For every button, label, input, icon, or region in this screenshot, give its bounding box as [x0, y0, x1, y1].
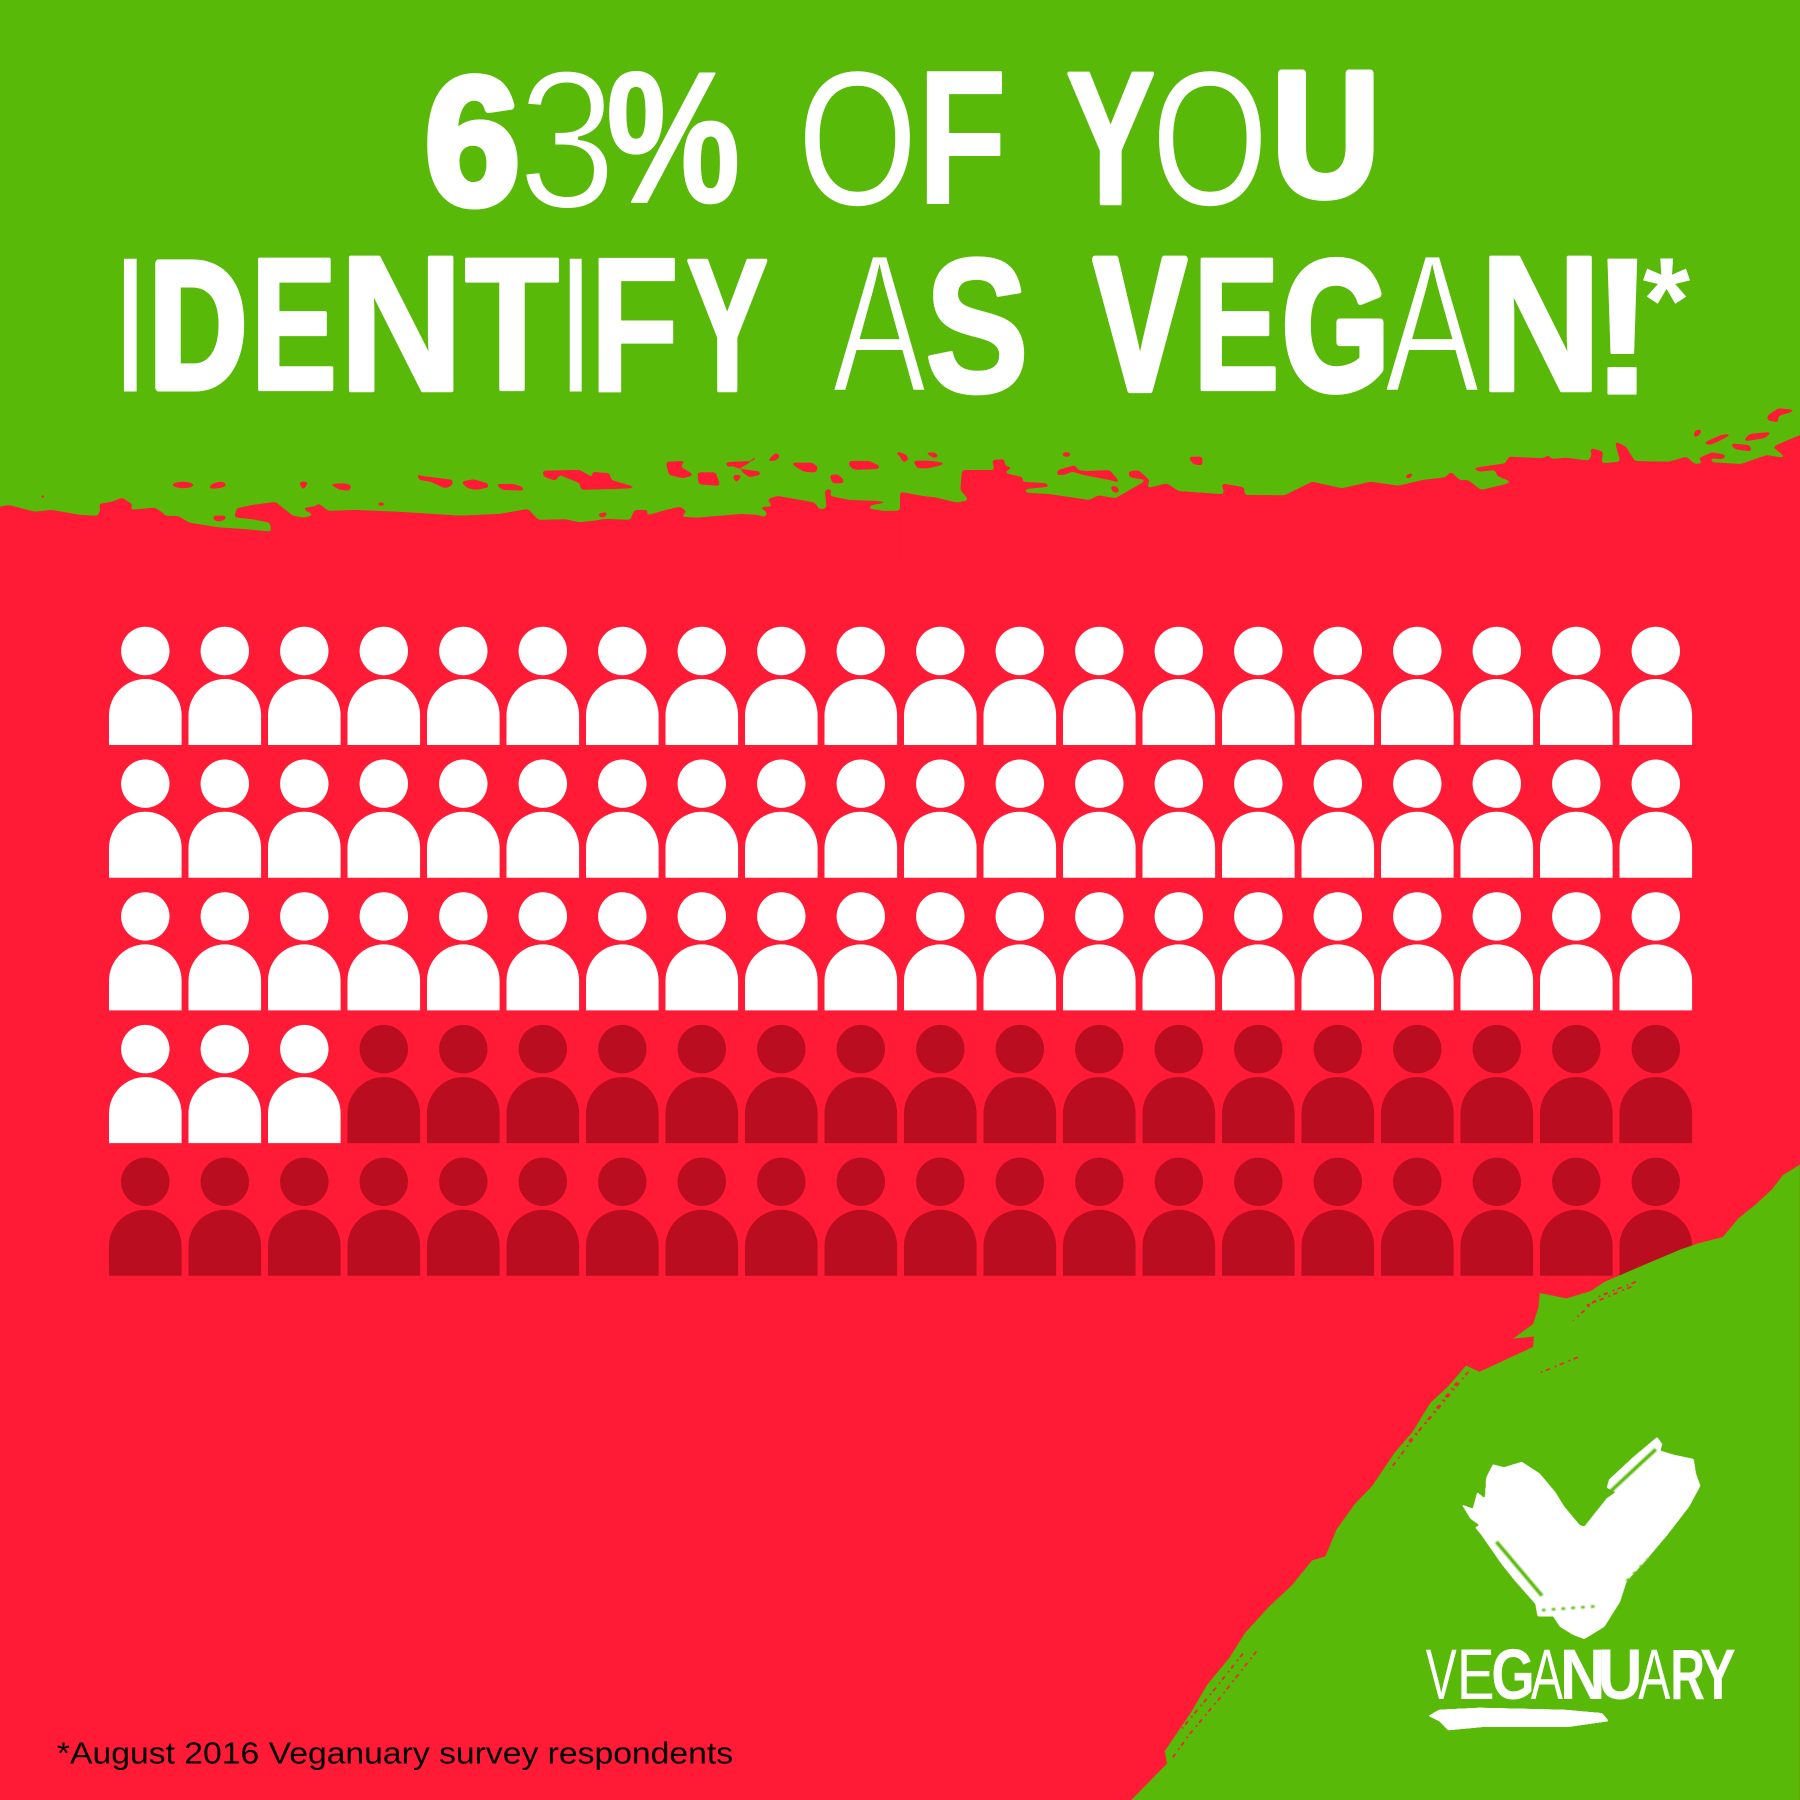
wordmark: VEGANUARY: Y — [1700, 1636, 1736, 1715]
icon: brushed white heart — [1462, 1437, 1700, 1639]
title line 2: IDENTIFY AS VEGAN!*: G — [1282, 223, 1389, 428]
title line 2: IDENTIFY AS VEGAN!*: I — [111, 216, 149, 432]
footnote: *August 2016 Veganuary survey respondents — [57, 1738, 733, 1771]
row 3: 20 white people — [109, 892, 1692, 1010]
title line 2: IDENTIFY AS VEGAN!*: D — [149, 225, 247, 426]
row 4: 3 white people, 17 dark people — [109, 1025, 1692, 1143]
title line 1: 63% OF YOU: O — [1152, 32, 1268, 245]
title line 1: 63% OF YOU: Y — [1066, 33, 1155, 243]
title line 1: 63% OF YOU: 3 — [518, 29, 616, 250]
panel: green corner with brushed edge — [1131, 1165, 1800, 1800]
title line 2: IDENTIFY AS VEGAN!*: ! — [1590, 218, 1655, 436]
title line 2: IDENTIFY AS VEGAN!*: I — [558, 216, 593, 432]
wordmark: VEGANUARY: A — [1531, 1636, 1563, 1715]
wordmark: VEGANUARY: E — [1457, 1636, 1495, 1715]
title line 2: IDENTIFY AS VEGAN!*: V — [1094, 219, 1186, 429]
title line 1: 63% OF YOU: F — [918, 31, 1007, 244]
title — [111, 29, 1691, 436]
title line 2: IDENTIFY AS VEGAN!* — [111, 212, 1691, 436]
people pictogram: 63 of 100 highlighted — [109, 627, 1692, 1276]
title line 2: IDENTIFY AS VEGAN!*: N — [339, 215, 463, 431]
title line 2: IDENTIFY AS VEGAN!*: T — [465, 219, 559, 429]
title line 2: IDENTIFY AS VEGAN!*: N — [1480, 215, 1601, 431]
title line 2: IDENTIFY AS VEGAN!*: E — [1193, 219, 1279, 429]
logo: Veganuary — [1426, 1437, 1736, 1730]
logo brush underline — [1428, 1708, 1609, 1730]
title line 2: IDENTIFY AS VEGAN!*: * — [1643, 232, 1691, 368]
title line 1: 63% OF YOU: U — [1273, 36, 1379, 233]
wordmark: VEGANUARY: V — [1426, 1636, 1457, 1715]
title line 1: 63% OF YOU: O — [798, 32, 917, 245]
title line 2: IDENTIFY AS VEGAN!*: A — [832, 212, 927, 433]
wordmark: VEGANUARY — [1426, 1636, 1736, 1715]
wordmark: VEGANUARY: N — [1560, 1636, 1606, 1715]
row 5: 20 dark people — [109, 1158, 1692, 1276]
wordmark: VEGANUARY: U — [1598, 1636, 1643, 1715]
wordmark: VEGANUARY: G — [1491, 1636, 1535, 1715]
row 2: 20 white people — [109, 759, 1692, 878]
title line 2: IDENTIFY AS VEGAN!*: E — [251, 219, 337, 429]
panel: green header background — [0, 0, 1800, 597]
panel: red main background with torn edge — [0, 408, 1800, 1800]
wordmark: VEGANUARY: A — [1638, 1636, 1671, 1715]
title line 1: 63% OF YOU: 6 — [425, 41, 520, 243]
title line 1: 63% OF YOU — [425, 29, 1379, 250]
wordmark: VEGANUARY: R — [1670, 1636, 1705, 1715]
title line 2: IDENTIFY AS VEGAN!*: Y — [686, 220, 768, 430]
title line 2: IDENTIFY AS VEGAN!*: A — [1384, 212, 1480, 433]
title line 2: IDENTIFY AS VEGAN!*: F — [589, 216, 680, 432]
row 1: 20 white people — [109, 627, 1692, 745]
title line 1: 63% OF YOU: % — [606, 33, 740, 242]
title line 2: IDENTIFY AS VEGAN!*: S — [925, 219, 1029, 432]
